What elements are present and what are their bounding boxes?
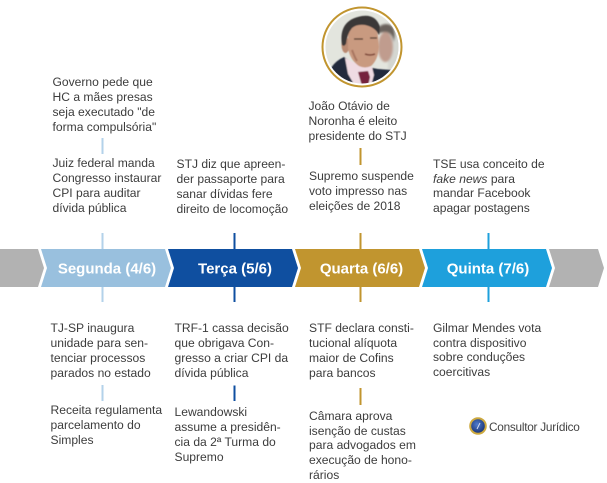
text: Quarta bottom 1: tucional alíquota (309, 336, 397, 350)
logo: Consultor Jurídico: Consultor Jurídico (489, 420, 580, 434)
text: Segunda top 1 (52, 74, 156, 134)
text: Quarta top 2: eleições de 2018 (309, 199, 400, 213)
text: Terça top: der passaporte para (176, 172, 285, 186)
text: Quarta bottom 2: rários (309, 468, 339, 482)
text: Segunda top 1: HC a mães presas (52, 90, 153, 104)
text: Segunda top 2: CPI para auditar (52, 186, 141, 200)
text: Terça bottom 2 (174, 404, 281, 464)
portrait (322, 6, 402, 88)
text: Segunda top 1: Governo pede que (52, 74, 153, 88)
text: Terça top: STJ diz que apreen- (176, 156, 285, 170)
text: Segunda bottom 1: unidade para sen- (50, 336, 148, 350)
text: Segunda bottom 2 (50, 402, 162, 446)
text: Segunda bottom 1: TJ-SP inaugura (50, 321, 134, 335)
text: Terça bottom 2: assume a presidên- (174, 420, 281, 434)
text: Segunda top 2: Congresso instaurar (52, 170, 161, 184)
right gray arrow (549, 249, 604, 287)
arrow: Quinta (422, 249, 552, 287)
text: Segunda top 2 (52, 156, 162, 214)
text: Quarta bottom 2: para advogados em (309, 438, 416, 452)
text: Terça top: direito de locomoção (176, 202, 288, 216)
arrow: Segunda (41, 249, 171, 287)
arrow: Segunda: Segunda (4/6) (58, 260, 156, 278)
text: Quinta top: fake news para (433, 172, 515, 186)
text: Segunda top 2: dívida pública (52, 200, 126, 214)
text: Segunda bottom 1 (50, 321, 151, 380)
text: Quarta top 1 (308, 99, 407, 143)
text: Terça top (176, 156, 288, 216)
text: Terça bottom 1: TRF-1 cassa decisão (174, 321, 289, 335)
text: Segunda bottom 2: Simples (50, 432, 94, 446)
text: Segunda bottom 1: parados no estado (50, 366, 151, 380)
text: Terça bottom 2: Lewandowski (174, 404, 247, 418)
text: Quinta bottom: contra dispositivo (433, 336, 526, 350)
text: Segunda bottom 1: tenciar processos (50, 351, 145, 365)
text: Quarta bottom 1: para bancos (309, 366, 376, 380)
text: Quinta top: mandar Facebook (433, 186, 530, 200)
text: Quarta top 1: presidente do STJ (308, 129, 407, 143)
text: Terça bottom 2: cia da 2ª Turma do (174, 434, 276, 448)
text: Quarta bottom 2: isenção de custas (309, 424, 406, 438)
text: Segunda top 2: Juiz federal manda (52, 156, 155, 170)
text: Terça bottom 2: Supremo (174, 450, 224, 464)
text: Quarta top 2: voto impresso nas (309, 184, 407, 198)
text: Segunda top 1: forma compulsória" (52, 120, 156, 134)
text: Quarta top 2 (309, 169, 414, 213)
text: Terça bottom 1: que obrigava Con- (174, 336, 274, 350)
text: Terça bottom 1: gresso a criar CPI da (174, 351, 288, 365)
text: Quarta top 1: Noronha é eleito (308, 114, 397, 128)
text: Quarta bottom 1: STF declara consti- (309, 321, 414, 335)
text: Quarta bottom 2 (309, 409, 416, 482)
text: Segunda top 1: seja executado "de (52, 104, 155, 118)
arrow: Quinta: Quinta (7/6) (447, 260, 529, 278)
text: Quarta bottom 2: execução de hono- (309, 453, 412, 467)
text: Segunda bottom 2: Receita regulamenta (50, 402, 162, 416)
text: Quinta bottom (433, 321, 542, 379)
text: Quarta bottom 2: Câmara aprova (309, 409, 392, 423)
text: Terça top: sanar dívidas fere (176, 186, 273, 200)
text: Quinta bottom: Gilmar Mendes vota (433, 321, 541, 335)
text: Terça bottom 1: dívida pública (174, 366, 248, 380)
text: Quarta top 2: Supremo suspende (309, 169, 414, 183)
text: Quinta top: apagar postagens (433, 200, 530, 214)
arrow: Quarta: Quarta (6/6) (320, 260, 403, 278)
text: Quinta top (433, 157, 545, 214)
arrow: Quarta (295, 249, 425, 287)
text: Quinta bottom: coercitivas (433, 365, 490, 379)
text: Quarta top 1: João Otávio de (308, 99, 390, 113)
text: Quarta bottom 1: maior de Cofins (309, 351, 394, 365)
arrow: Terça: Terça (5/6) (198, 260, 272, 278)
text: Quinta bottom: sobre conduções (433, 350, 525, 364)
text: Terça bottom 1 (174, 321, 289, 380)
left gray arrow (0, 249, 44, 287)
text: Quinta top: TSE usa conceito de (433, 157, 545, 171)
arrow: Terça (168, 249, 298, 287)
text: Segunda bottom 2: parcelamento do (50, 418, 141, 432)
logo: Consultor Jurídico (469, 417, 580, 435)
text: Quarta bottom 1 (309, 321, 414, 380)
